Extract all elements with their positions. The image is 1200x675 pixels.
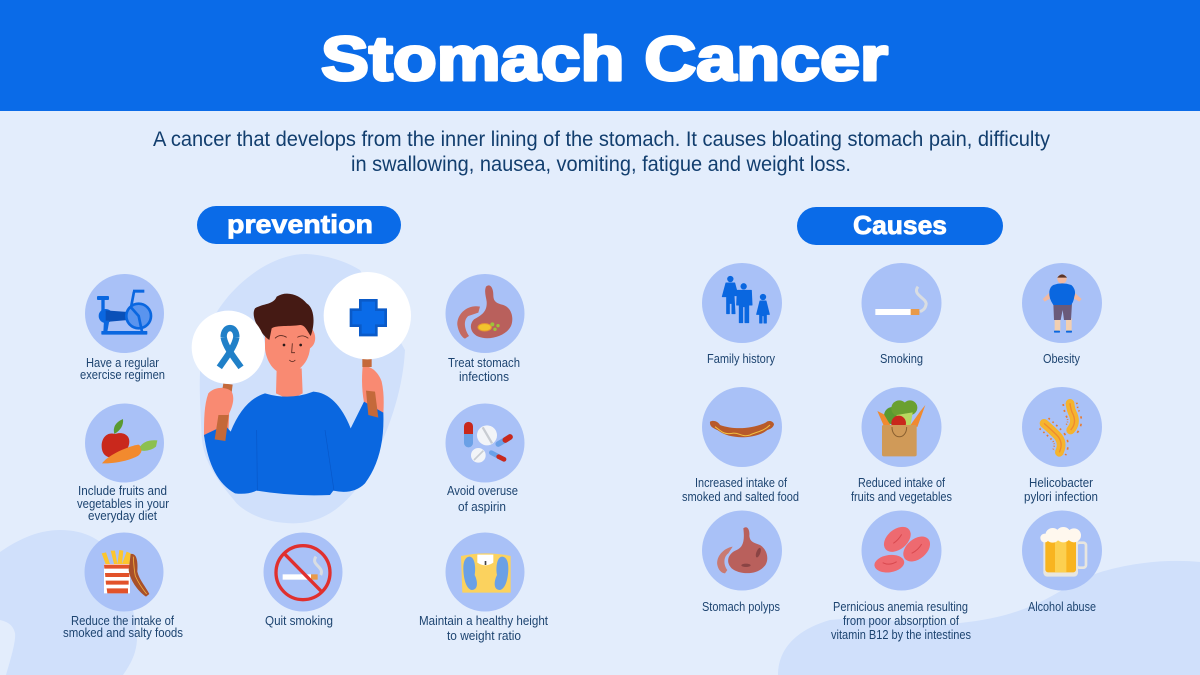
- item: healthy weight: [419, 532, 548, 643]
- label: fruits and vegetables reduced: Reduced intake of: [858, 476, 945, 490]
- icon: no smoking sign: [276, 546, 330, 600]
- item: treat stomach infections: [446, 274, 524, 384]
- label: pernicious anemia: vitamin B12 by the intestines: [831, 628, 971, 642]
- label: helicobacter: Helicobacter: [1029, 476, 1093, 490]
- item: family history: [702, 263, 782, 366]
- item: helicobacter: [1022, 387, 1102, 504]
- icon: family: [722, 276, 769, 323]
- label: helicobacter: pylori infection: [1024, 490, 1098, 504]
- label: healthy weight: to weight ratio: [447, 629, 521, 643]
- label: fruits and vegetables: everyday diet: [88, 509, 157, 523]
- icon: apple and carrot: [102, 419, 157, 463]
- icon: weighing scale: [461, 553, 511, 593]
- item: fruits and vegetables reduced: [851, 387, 952, 504]
- label: avoid aspirin: [447, 484, 518, 514]
- background blob: bottom right: [778, 561, 1200, 675]
- heading: prevention: [197, 206, 401, 244]
- item: avoid aspirin: [446, 404, 524, 514]
- label: fruits and vegetables reduced: fruits and vegetables: [851, 490, 952, 504]
- label: helicobacter: [1024, 476, 1098, 504]
- intro text: A cancer that develops from the inner lining of the stomach. It causes bloating stomach pain, difficulty: [153, 128, 1050, 151]
- item: alcohol abuse: [1022, 510, 1102, 614]
- intro text: [153, 128, 1050, 176]
- label: quit smoking: Quit smoking: [265, 614, 333, 628]
- icon: beer mug: [1040, 527, 1086, 577]
- item: smoking: [862, 263, 942, 366]
- label: regular exercise: [80, 356, 165, 382]
- label: obesity: Obesity: [1043, 352, 1081, 366]
- label: family history: Family history: [707, 352, 776, 366]
- item: smoked and salted food: [682, 387, 799, 504]
- background blob: bottom left: [0, 530, 137, 675]
- illustration: person holding signs: [192, 254, 411, 523]
- item: fruits and vegetables: [77, 404, 169, 523]
- heading: causes: [797, 207, 1003, 245]
- label: treat stomach infections: [448, 356, 520, 384]
- label: smoked and salted food: Increased intake of: [695, 476, 787, 490]
- label: fruits and vegetables: [77, 484, 169, 523]
- label: avoid aspirin: Avoid overuse: [447, 484, 518, 498]
- icon: stomach with polyps: [717, 527, 767, 573]
- item: obesity: [1022, 263, 1102, 366]
- icon: cigarette: [875, 287, 926, 315]
- label: healthy weight: [419, 614, 548, 643]
- label: smoked and salted food: [682, 476, 799, 504]
- label: treat stomach infections: infections: [459, 370, 509, 384]
- heading: causes: Causes: [853, 210, 947, 240]
- label: regular exercise: Have a regular: [86, 356, 159, 370]
- label: reduce smoked foods: Reduce the intake of: [71, 614, 174, 628]
- label: healthy weight: Maintain a healthy height: [419, 614, 548, 628]
- icon: red blood cells: [873, 522, 935, 574]
- item: pernicious anemia: [831, 510, 971, 642]
- label: reduce smoked foods: [63, 614, 183, 640]
- icon: obese person: [1043, 274, 1082, 333]
- item: stomach polyps: [702, 510, 782, 614]
- icon: pills: [464, 422, 510, 463]
- label: avoid aspirin: of aspirin: [458, 500, 506, 514]
- label: alcohol abuse: Alcohol abuse: [1028, 600, 1096, 614]
- item: quit smoking: [264, 532, 342, 628]
- label: treat stomach infections: Treat stomach: [448, 356, 520, 370]
- label: pernicious anemia: from poor absorption of: [843, 614, 959, 628]
- icon: fries and sausage: [102, 550, 149, 597]
- label: pernicious anemia: Pernicious anemia resulting: [833, 600, 968, 614]
- label: smoking: Smoking: [880, 352, 923, 366]
- label: stomach polyps: Stomach polyps: [702, 600, 780, 614]
- intro text: in swallowing, nausea, vomiting, fatigue and weight loss.: [351, 153, 851, 176]
- icon: grocery bag: [877, 400, 925, 456]
- icon: sausage: [710, 421, 774, 437]
- label: smoked and salted food: smoked and salted food: [682, 490, 799, 504]
- title: Stomach Cancer: [321, 25, 888, 94]
- label: reduce smoked foods: smoked and salty foods: [63, 626, 183, 640]
- item: regular exercise: [80, 274, 165, 382]
- item: reduce smoked foods: [63, 532, 183, 640]
- label: pernicious anemia: [831, 600, 971, 642]
- heading: prevention: prevention: [227, 209, 373, 239]
- label: regular exercise: exercise regimen: [80, 368, 165, 382]
- header banner: [0, 0, 1200, 111]
- label: fruits and vegetables: Include fruits and: [78, 484, 167, 498]
- icon: exercise bike: [97, 290, 151, 335]
- icon: infected stomach: [457, 285, 512, 339]
- label: fruits and vegetables reduced: [851, 476, 952, 504]
- icon: bacteria: [1044, 403, 1075, 452]
- label: fruits and vegetables: vegetables in your: [77, 497, 169, 511]
